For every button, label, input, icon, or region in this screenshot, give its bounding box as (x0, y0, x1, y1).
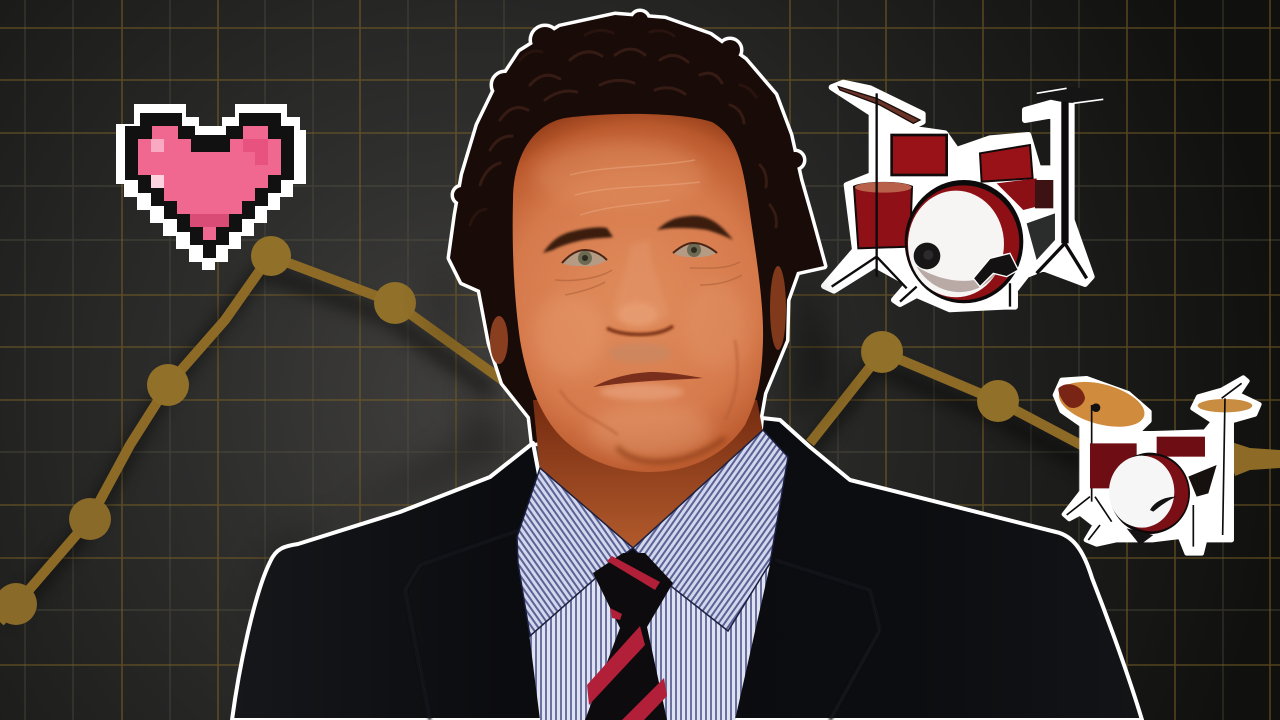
cymbal (838, 87, 920, 123)
right eye (673, 243, 717, 257)
icon: pixel heart (116, 104, 306, 270)
right eyebrow (657, 216, 733, 240)
left tom (1090, 443, 1137, 488)
collar left (517, 468, 633, 636)
left eyebrow (543, 227, 613, 253)
stand gap (1188, 465, 1217, 497)
right cheek (683, 281, 747, 369)
floor tom (854, 183, 912, 248)
necktie (585, 553, 673, 720)
forehead wrinkles (570, 160, 700, 215)
nose (607, 240, 673, 334)
bass drum (905, 180, 1023, 303)
suit jacket (232, 418, 1142, 720)
bass drum (1110, 453, 1190, 534)
sticker outline (824, 83, 1092, 309)
line chart: left series (0, 236, 505, 625)
pedal (973, 253, 1018, 287)
collar right (633, 430, 788, 631)
rack tom left (892, 135, 947, 175)
sticker outline (1055, 378, 1259, 553)
person (232, 12, 1142, 720)
chin highlight (588, 402, 712, 458)
ear right (770, 266, 786, 350)
under-eye wrinkles (555, 262, 742, 295)
smile lines (560, 340, 738, 435)
left cheek (534, 293, 606, 377)
icon: large drum kit (824, 83, 1105, 309)
person: drop shadow (240, 250, 840, 640)
back tom (997, 178, 1037, 210)
gap in stand (1027, 213, 1055, 260)
stands (832, 93, 1010, 307)
stands (1067, 383, 1242, 547)
rack tom right (980, 145, 1033, 182)
icon: small drum kit (1054, 374, 1259, 553)
crash cymbal (1054, 374, 1149, 435)
ear left (490, 316, 508, 364)
hair (450, 12, 824, 443)
hair white outline (450, 12, 824, 443)
chin fold (617, 438, 725, 462)
neck (533, 400, 763, 548)
mouth (593, 372, 703, 400)
ride cymbal (1198, 399, 1252, 412)
right tom (1157, 437, 1205, 457)
left eye (562, 250, 607, 266)
hair curls (470, 30, 776, 227)
shirt front (528, 565, 770, 720)
forehead shading (535, 141, 705, 209)
line chart: right series (804, 331, 1280, 476)
right cymbal (1033, 87, 1105, 103)
face (513, 114, 763, 472)
lapel seams (405, 530, 880, 720)
philtrum shadow (608, 343, 672, 363)
